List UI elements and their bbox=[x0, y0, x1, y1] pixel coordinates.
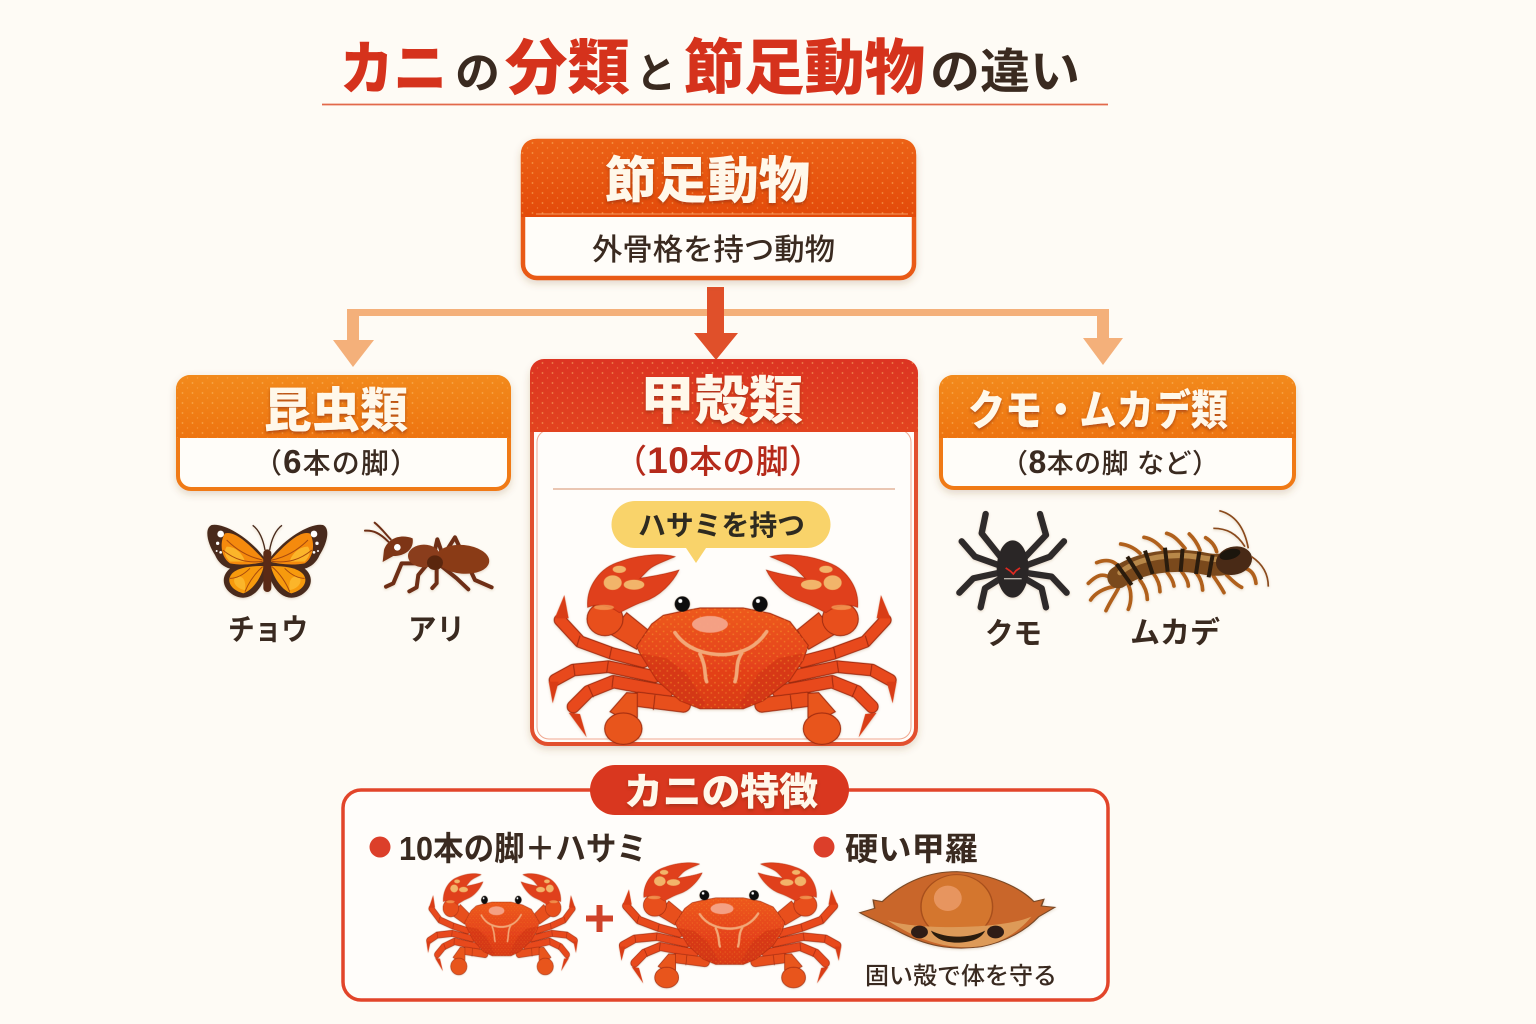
title: カニ bbox=[340, 37, 447, 102]
panel: insects bbox=[176, 375, 511, 489]
label: centipede: ムカデ bbox=[1130, 616, 1220, 650]
icon: centipede bbox=[1088, 511, 1268, 611]
bullet: hard shell: 硬い甲羅 bbox=[845, 831, 978, 867]
panel: spiders and centipedes bbox=[939, 375, 1296, 488]
panel: crab features bbox=[343, 765, 1108, 1000]
panel: spiders and centipedes: （8本の脚 など） bbox=[1001, 444, 1219, 480]
bullet: legs and claws: 10本の脚＋ハサミ bbox=[399, 830, 647, 867]
icon: butterfly bbox=[207, 525, 327, 598]
icon: plus sign bbox=[586, 905, 613, 932]
callout: has claws: ハサミを持つ bbox=[638, 510, 805, 541]
connector arrows bbox=[333, 287, 1123, 367]
panel: arthropods: 節足動物 bbox=[605, 153, 810, 209]
panel: crustaceans bbox=[530, 359, 918, 744]
title: と bbox=[636, 50, 676, 97]
panel: insects: （6本の脚） bbox=[254, 443, 418, 480]
title bbox=[322, 35, 1108, 104]
title: 節足動物 bbox=[684, 35, 925, 102]
icon: ant bbox=[365, 523, 492, 591]
caption: shell protects body: 固い殻で体を守る bbox=[865, 963, 1057, 990]
icon: crab shell bbox=[860, 872, 1055, 948]
panel: arthropods: 外骨格を持つ動物 bbox=[592, 234, 835, 267]
panel: crustaceans: 甲殻類 bbox=[640, 373, 803, 431]
icon: medium crab bbox=[619, 863, 841, 988]
panel: spiders and centipedes: クモ・ムカデ類 bbox=[968, 387, 1228, 434]
icon: large crab bbox=[549, 555, 897, 744]
label: spider: クモ bbox=[985, 618, 1042, 651]
panel: arthropods bbox=[521, 139, 916, 278]
icon: small crab bbox=[426, 874, 578, 975]
panel: insects: 昆虫類 bbox=[264, 385, 408, 438]
title: の bbox=[455, 49, 500, 98]
heading pill bbox=[590, 765, 849, 815]
label: ant: アリ bbox=[408, 614, 465, 647]
panel: crustaceans: （10本の脚） bbox=[614, 440, 822, 481]
icon: spider bbox=[959, 514, 1067, 607]
heading pill: カニの特徴 bbox=[624, 772, 818, 814]
label: butterfly: チョウ bbox=[228, 614, 308, 647]
title: の違い bbox=[930, 46, 1080, 99]
callout: has claws bbox=[612, 501, 830, 563]
title: 分類 bbox=[505, 35, 630, 102]
